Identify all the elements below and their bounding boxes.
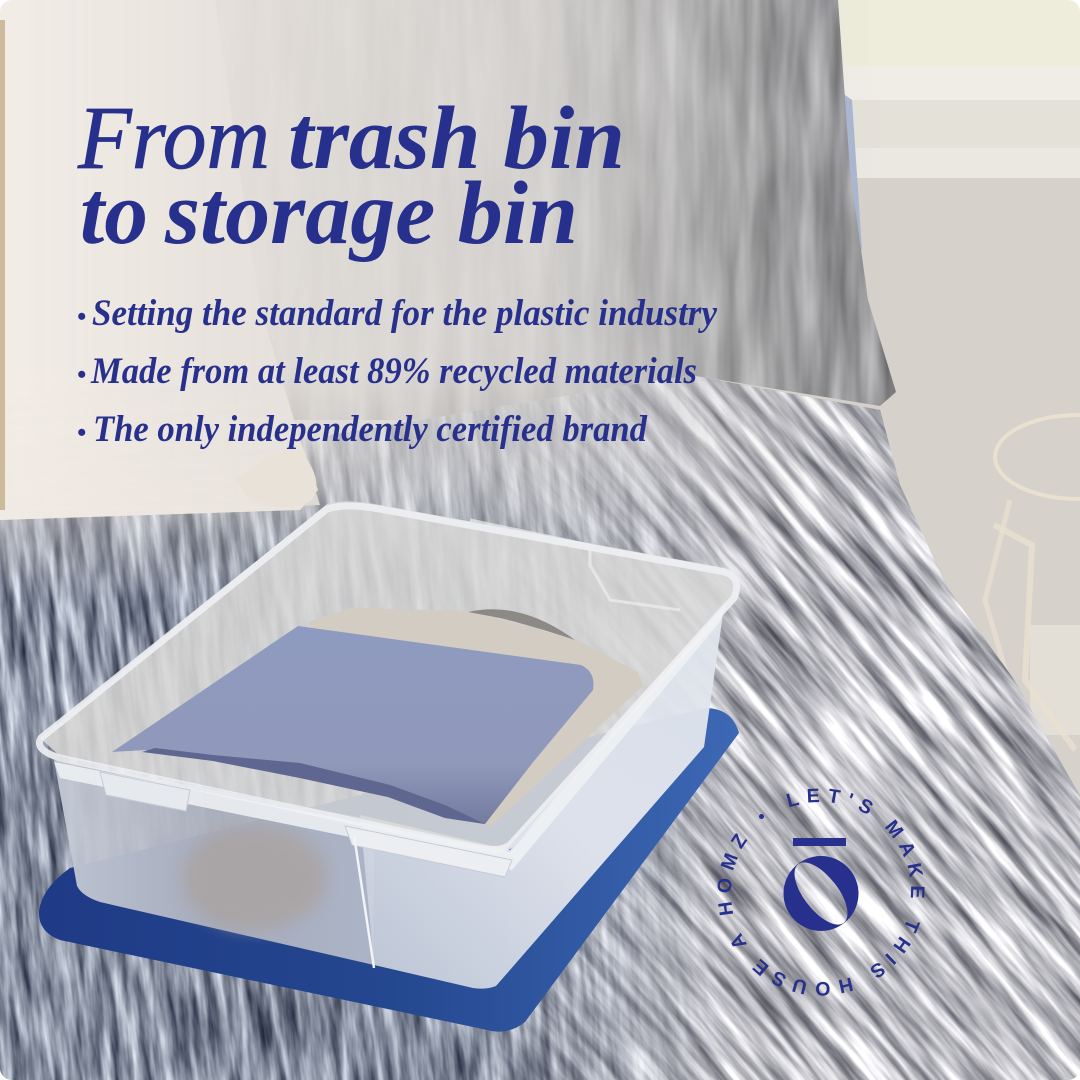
title: to [80, 164, 148, 263]
bullet list: Made from at least 89% recycled materials [90, 351, 697, 392]
title: trash bin [288, 89, 625, 188]
storage bin [40, 501, 740, 989]
back handle [470, 520, 680, 610]
tan round shadow [183, 826, 327, 930]
bullet list [77, 293, 718, 450]
title [77, 89, 625, 263]
left cream cushion [0, 0, 318, 520]
bullet list: • [77, 418, 86, 447]
grey pillow [284, 0, 896, 420]
bin right body [360, 600, 725, 989]
grey folded item [468, 609, 575, 640]
logo mark bar [793, 838, 846, 846]
bin interior [40, 501, 740, 850]
storage bin lid [39, 708, 739, 1032]
bin left body [54, 760, 374, 965]
title: storage bin [164, 164, 578, 263]
text backdrop fade [0, 0, 880, 600]
left edge strip [0, 20, 5, 510]
logo mark O [784, 856, 858, 931]
blue pillow edge [838, 90, 862, 250]
cushion corner [235, 449, 316, 508]
circular tagline: LET'S MAKE THIS HOUSE A HOMZ [718, 788, 925, 996]
bin rim [40, 506, 737, 849]
blue folded cloth [112, 626, 594, 824]
title: From [77, 89, 270, 188]
bin handles [100, 772, 190, 811]
bullet list: The only independently certified brand [93, 409, 647, 450]
bullet list: • [77, 360, 86, 389]
front rim band [54, 605, 725, 870]
side table [985, 415, 1080, 750]
cream folded clothes [308, 608, 643, 826]
bullet list: • [77, 302, 86, 331]
bullet list: Setting the standard for the plastic industry [92, 293, 718, 334]
bed comforter [0, 376, 1080, 1080]
logo badge [718, 788, 925, 996]
badge dot [759, 814, 764, 819]
cloth folds [142, 748, 485, 824]
